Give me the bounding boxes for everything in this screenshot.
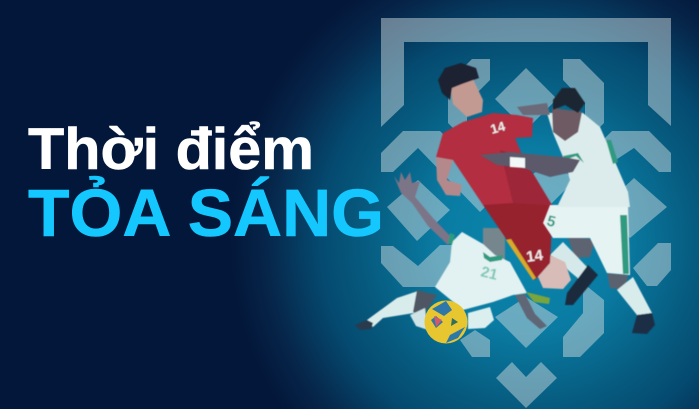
shorts — [483, 192, 553, 280]
jersey — [547, 113, 630, 207]
neck and face — [450, 77, 483, 117]
jersey — [435, 232, 527, 310]
football — [424, 300, 468, 344]
jersey number: 14 — [489, 118, 507, 137]
jersey number — [606, 140, 618, 164]
face — [552, 108, 582, 141]
shorts trim — [506, 239, 536, 280]
thigh — [413, 290, 437, 317]
AFF logo pattern — [381, 18, 671, 408]
logo top frame — [381, 18, 671, 127]
arm — [436, 157, 462, 196]
knee — [535, 255, 571, 289]
player 2: upper body — [480, 88, 630, 275]
right thigh — [607, 273, 628, 290]
logo second row chevrons — [381, 131, 671, 212]
left leg and sock — [567, 235, 595, 258]
wristband — [510, 157, 525, 168]
foot — [355, 320, 373, 330]
hair — [553, 88, 585, 113]
forearm — [480, 152, 580, 177]
right boot — [632, 313, 655, 334]
shorts — [543, 205, 630, 275]
jersey — [436, 113, 552, 205]
sleeve accent — [563, 153, 584, 163]
sleeve and collar — [448, 233, 503, 262]
lower arm — [515, 294, 547, 329]
title line 2: TỎA SÁNG — [28, 176, 384, 251]
title line 1: Thời điểm — [28, 117, 314, 182]
head — [483, 228, 505, 262]
title — [28, 117, 384, 251]
leg and sock — [367, 291, 420, 327]
jersey shading — [500, 150, 552, 205]
right sock — [617, 277, 652, 315]
player 1: red kit — [436, 63, 571, 304]
number 21: 21 — [479, 263, 499, 284]
green boot — [526, 292, 550, 304]
raised arm and hand — [394, 172, 452, 245]
raised arm — [517, 103, 550, 115]
shorts number: 14 — [525, 247, 545, 266]
shorts stripe — [620, 215, 629, 274]
logo upper brackets — [448, 59, 604, 142]
logo side diamonds — [387, 178, 667, 241]
player 3: sliding white kit — [355, 172, 547, 330]
left boot — [565, 265, 598, 305]
player 2: white kit — [550, 235, 655, 334]
logo upper diamond — [495, 68, 557, 130]
second leg — [468, 307, 494, 329]
logo lower center shapes — [460, 283, 604, 357]
shorts number: 5 — [545, 212, 557, 231]
shorts — [410, 308, 428, 330]
logo lower chevrons — [381, 243, 671, 287]
logo bottom heart — [496, 362, 557, 408]
hair — [438, 63, 479, 100]
